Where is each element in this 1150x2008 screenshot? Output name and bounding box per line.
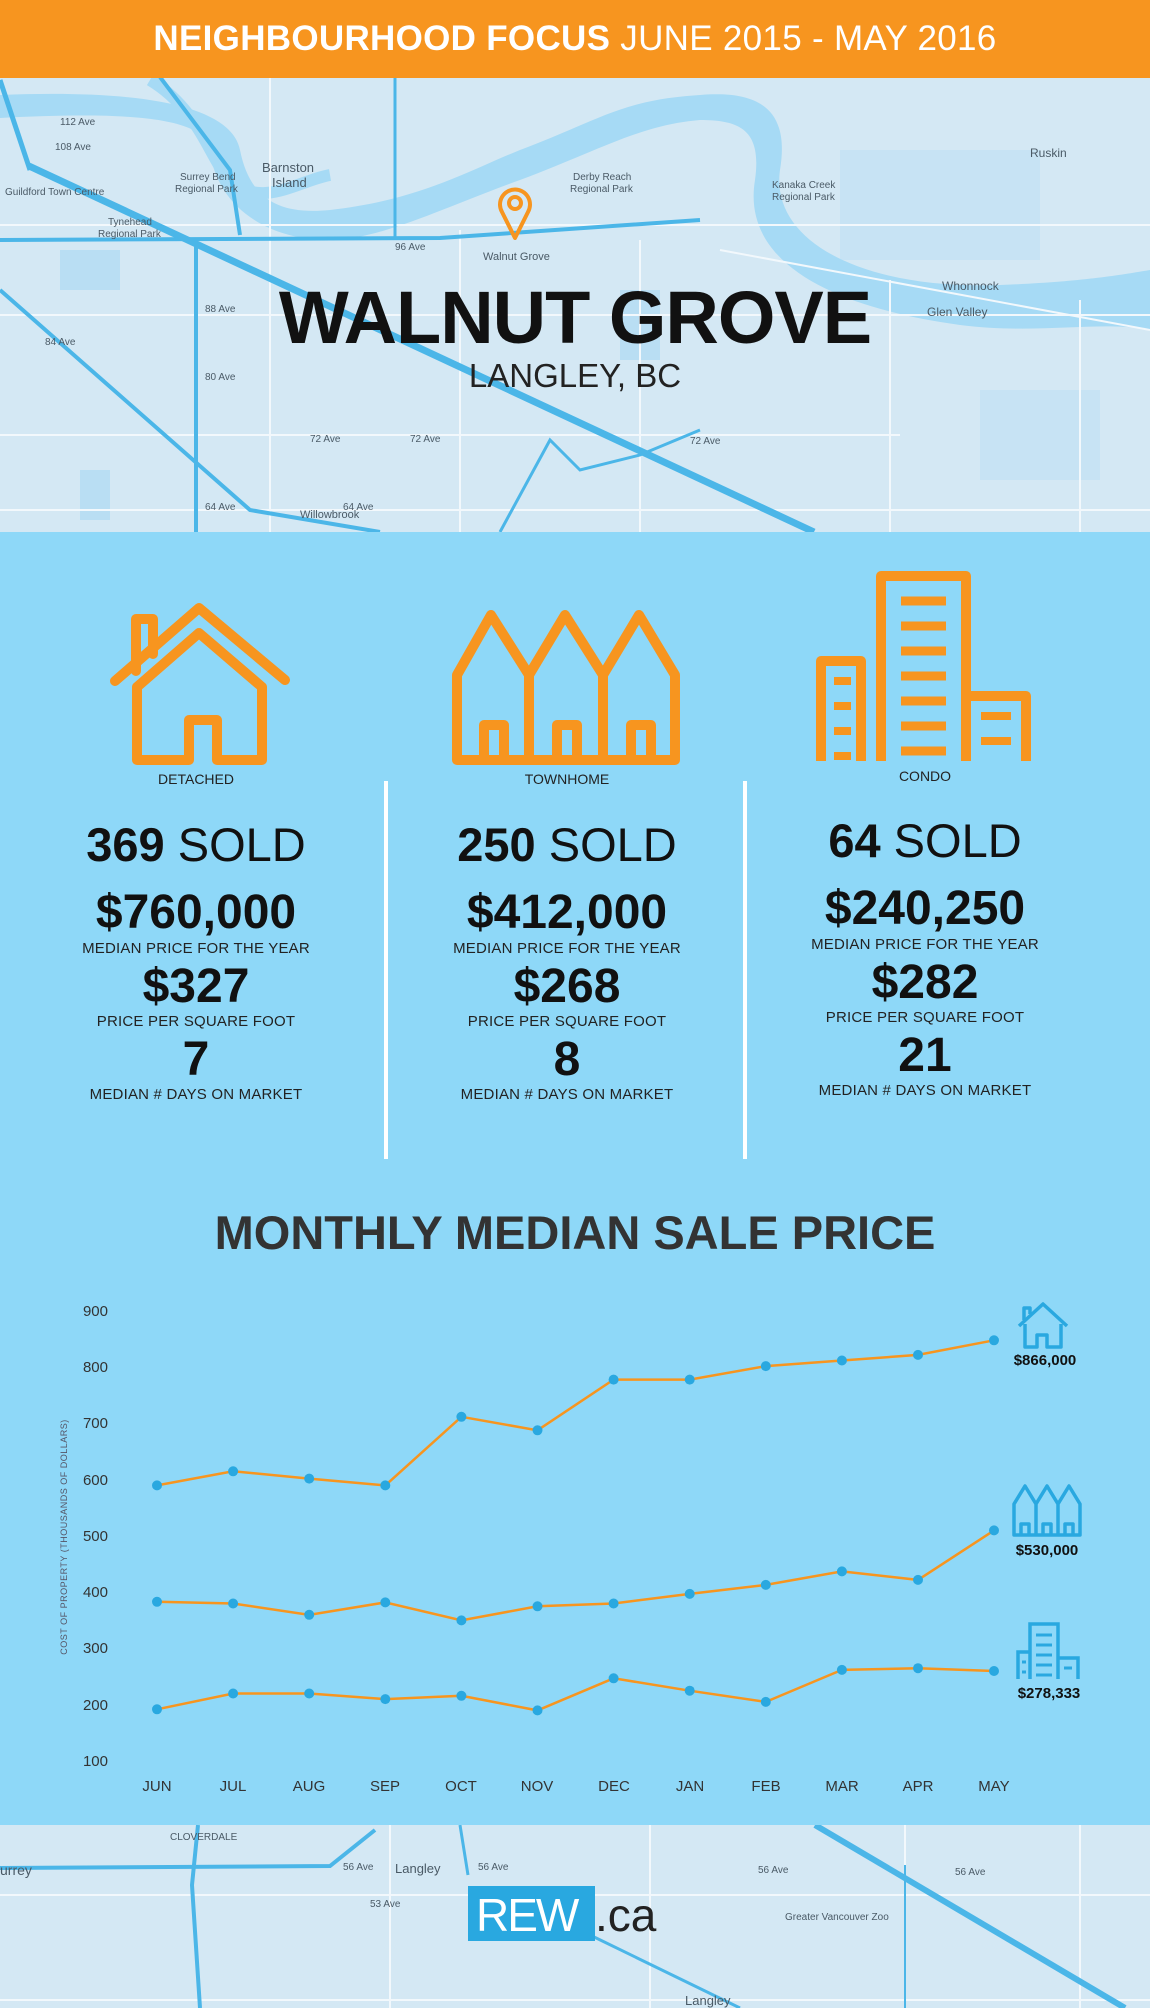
top map background: Surrey Bend: [180, 172, 236, 183]
top map background: Regional Park: [175, 184, 239, 195]
header bar: [0, 0, 1150, 78]
top map background: 88 Ave: [205, 304, 236, 315]
bottom map background: Langley: [685, 1993, 731, 2008]
y axis labels: 600: [83, 1472, 108, 1489]
top map background: 96 Ave: [395, 242, 426, 253]
icon: townhome: [452, 610, 680, 765]
header bar: NEIGHBOURHOOD FOCUS JUNE 2015 - MAY 2016: [153, 19, 997, 58]
top map background: Kanaka Creek: [772, 180, 836, 191]
y axis labels: 700: [83, 1415, 108, 1432]
top map background: Regional Park: [98, 229, 162, 240]
x axis labels: MAY: [978, 1778, 1010, 1795]
column: townhome stats: PRICE PER SQUARE FOOT: [468, 1013, 666, 1030]
column: condo stats: 21: [898, 1029, 952, 1082]
series: condo: [152, 1663, 999, 1715]
x axis labels: AUG: [293, 1778, 325, 1795]
column: detached stats: 7: [183, 1033, 209, 1086]
x axis labels: APR: [903, 1778, 934, 1795]
bottom map background: 56 Ave: [478, 1862, 509, 1873]
column: townhome stats: MEDIAN # DAYS ON MARKET: [461, 1086, 673, 1103]
bottom map background: 56 Ave: [758, 1865, 789, 1876]
y axis title: COST OF PROPERTY (THOUSANDS OF DOLLARS): [59, 1419, 69, 1655]
column: townhome stats: 250 SOLD: [457, 818, 677, 871]
y axis labels: [83, 1303, 108, 1770]
column: condo stats: $240,250: [825, 882, 1025, 935]
icon: condo: [816, 571, 1031, 761]
icon: detached house: [110, 603, 290, 765]
x axis labels: JUN: [142, 1778, 172, 1795]
logo: REW.ca: .ca: [595, 1889, 656, 1941]
series: detached: [152, 1335, 999, 1490]
icon: location pin: [498, 188, 532, 240]
column: townhome stats: $268: [514, 960, 620, 1013]
top map background: 108 Ave: [55, 142, 91, 153]
top map background: Walnut Grove: [483, 251, 550, 263]
column: detached stats: PRICE PER SQUARE FOOT: [97, 1013, 295, 1030]
label: detached end: $866,000: [1014, 1352, 1076, 1369]
column: condo stats: MEDIAN # DAYS ON MARKET: [819, 1082, 1031, 1099]
top map background: Island: [272, 175, 307, 190]
subtitle: LANGLEY, BC: [469, 357, 681, 394]
y axis labels: 100: [83, 1753, 108, 1770]
top map background: 72 Ave: [690, 436, 721, 447]
bottom map background: 53 Ave: [370, 1899, 401, 1910]
top map background: 80 Ave: [205, 372, 236, 383]
icon: chart condo: [1018, 1624, 1078, 1679]
icon: chart house: [1019, 1304, 1067, 1347]
x axis labels: JAN: [676, 1778, 704, 1795]
column: detached stats: MEDIAN PRICE FOR THE YEAR: [82, 940, 310, 957]
column: condo stats: MEDIAN PRICE FOR THE YEAR: [811, 936, 1039, 953]
column: townhome stats: [453, 818, 681, 1103]
top map background: 64 Ave: [205, 502, 236, 513]
column: detached stats: $327: [143, 960, 249, 1013]
y axis labels: 200: [83, 1697, 108, 1714]
column: condo stats: 64 SOLD: [828, 814, 1022, 867]
top map background: Willowbrook: [300, 509, 360, 521]
label: condo end: $278,333: [1018, 1685, 1080, 1702]
x axis labels: OCT: [445, 1778, 477, 1795]
top map background: 64 Ave: [343, 502, 374, 513]
bottom map background: 56 Ave: [955, 1867, 986, 1878]
bottom map background: 56 Ave: [343, 1862, 374, 1873]
label: detached: DETACHED: [158, 771, 234, 787]
top map background: Guildford Town Centre: [5, 187, 105, 198]
title: WALNUT GROVE: [279, 276, 871, 359]
top map background: 84 Ave: [45, 337, 76, 348]
line chart: [59, 1302, 1082, 1795]
top map background: 72 Ave: [310, 434, 341, 445]
top map background: 112 Ave: [60, 117, 96, 128]
top map background: Derby Reach: [573, 172, 631, 183]
y axis labels: 900: [83, 1303, 108, 1320]
x axis labels: SEP: [370, 1778, 400, 1795]
bottom map background: CLOVERDALE: [170, 1832, 238, 1843]
top map background: 72 Ave: [410, 434, 441, 445]
column: condo stats: [811, 814, 1039, 1099]
top map background: Ruskin: [1030, 146, 1067, 160]
column: detached stats: [82, 818, 310, 1103]
x axis labels: FEB: [751, 1778, 781, 1795]
chart title: MONTHLY MEDIAN SALE PRICE: [215, 1206, 935, 1259]
bottom map background: Greater Vancouver Zoo: [785, 1912, 889, 1923]
x axis labels: JUL: [220, 1778, 246, 1795]
top map background: Tynehead: [108, 217, 152, 228]
column: detached stats: $760,000: [96, 886, 296, 939]
column: townhome stats: MEDIAN PRICE FOR THE YEAR: [453, 940, 681, 957]
label: townhome end: $530,000: [1016, 1542, 1078, 1559]
y axis labels: 400: [83, 1584, 108, 1601]
column: condo stats: PRICE PER SQUARE FOOT: [826, 1009, 1024, 1026]
top map background: Whonnock: [942, 279, 1000, 293]
column: condo stats: $282: [872, 956, 978, 1009]
x axis labels: [142, 1778, 1010, 1795]
panel: stats: [0, 532, 1150, 1825]
top map background: Barnston: [262, 160, 314, 175]
x axis labels: DEC: [598, 1778, 630, 1795]
x axis labels: NOV: [521, 1778, 553, 1795]
column: detached stats: MEDIAN # DAYS ON MARKET: [90, 1086, 302, 1103]
column: townhome stats: 8: [554, 1033, 580, 1086]
y axis labels: 800: [83, 1359, 108, 1376]
dividers: [384, 781, 388, 1159]
column: detached stats: 369 SOLD: [86, 818, 306, 871]
top map background: Regional Park: [570, 184, 634, 195]
series: townhome: [152, 1525, 999, 1625]
y axis labels: 300: [83, 1640, 108, 1657]
column: townhome stats: $412,000: [467, 886, 667, 939]
y axis labels: 500: [83, 1528, 108, 1545]
top map background: Glen Valley: [927, 305, 987, 319]
logo: REW.ca: REW: [476, 1889, 577, 1941]
x axis labels: MAR: [825, 1778, 859, 1795]
label: townhome: TOWNHOME: [525, 771, 609, 787]
top map background: [0, 77, 1150, 532]
top map background: Regional Park: [772, 192, 836, 203]
bottom map background: urrey: [0, 1862, 32, 1878]
bottom map background: Langley: [395, 1861, 441, 1876]
bottom map background: [0, 1825, 1150, 2008]
label: condo: CONDO: [899, 768, 951, 784]
icon: chart townhome: [1014, 1486, 1080, 1535]
logo: REW.ca: [468, 1886, 656, 1941]
